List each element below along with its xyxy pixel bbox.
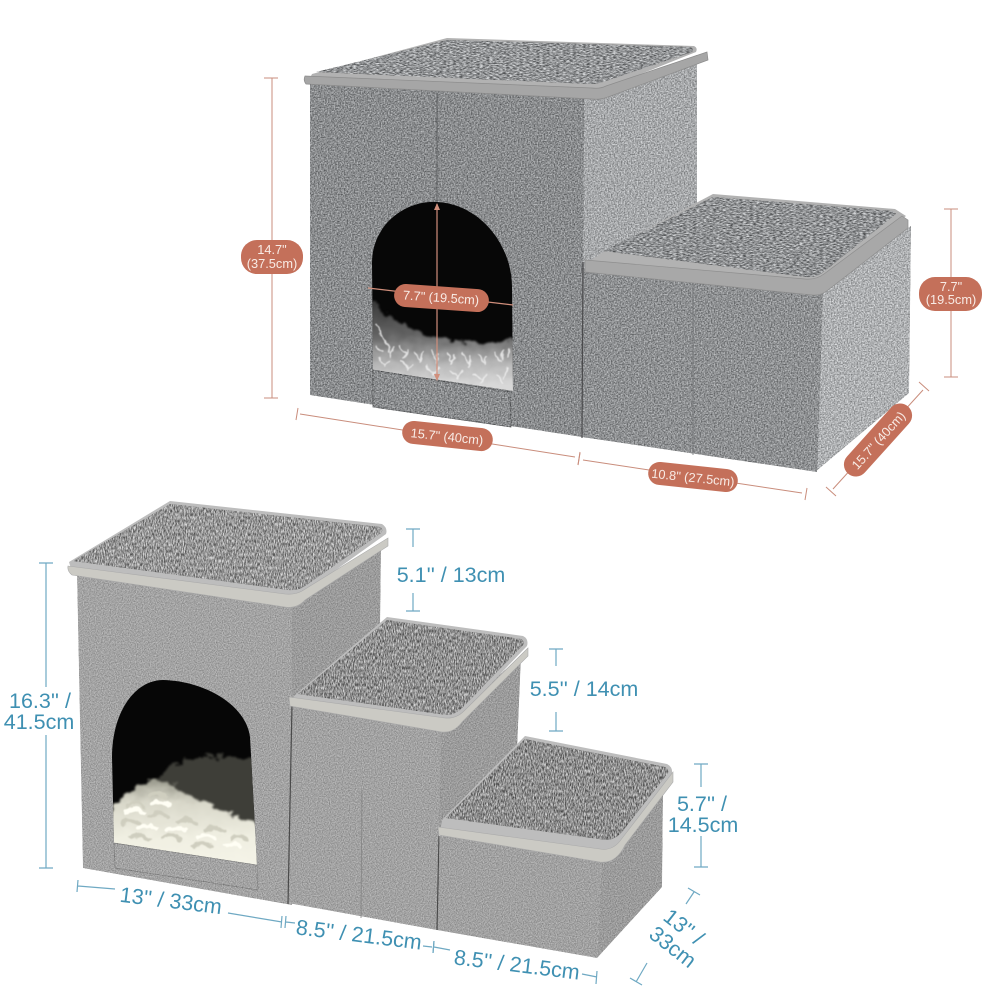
low step lid rim	[585, 216, 908, 295]
flap below door	[114, 843, 258, 890]
annotation: upper step height 7.7 in: 7.7"	[940, 279, 962, 294]
annotation: upper height 14.7 in: (37.5cm)	[247, 256, 297, 271]
fur strands	[376, 325, 509, 383]
front flap below door	[373, 370, 511, 427]
tall box right side	[582, 55, 697, 272]
annotation: upper width 15.7 in: 15.7" (40cm)	[410, 425, 484, 448]
annotation: lower depth 13 in: 33cm	[645, 922, 701, 973]
fur tufts	[122, 793, 247, 847]
tall box front face	[310, 80, 584, 437]
seam on low step front	[692, 287, 694, 455]
tall lid surface	[69, 501, 386, 600]
middle lid surface	[291, 617, 528, 724]
annotation: upper step width 10.8 in: 10.8" (27.5cm)	[651, 466, 735, 489]
middle step side	[437, 656, 521, 833]
low step right side	[815, 226, 911, 472]
panel: lower product, three-step pet house	[68, 501, 673, 958]
middle step front	[288, 700, 442, 930]
arch doorway	[112, 680, 257, 865]
annotation: upper step height 7.7 in	[919, 209, 982, 377]
low step carpet	[604, 197, 896, 277]
annotation: lower step 5.7 in: 5.7'' /	[677, 792, 727, 816]
annotation: lower step 5.1 in: 5.1'' / 13cm	[397, 563, 505, 587]
annotation: door size 7.7 in: 7.7" (19.5cm)	[402, 287, 480, 308]
annotation: lower step 5.7 in	[668, 764, 738, 867]
seam on tall box front	[436, 93, 438, 202]
tall carpet	[73, 504, 382, 590]
back shaded fur	[150, 756, 258, 830]
tall box front	[77, 572, 293, 905]
lid surface under carpet	[310, 38, 697, 92]
annotation: lower width 13 in	[77, 880, 282, 928]
annotation: middle step width 8.5 in: 8.5'' / 21.5cm	[295, 915, 423, 955]
annotation: upper height 14.7 in	[241, 78, 303, 398]
white fur bedding	[372, 300, 513, 391]
lowest lid surface	[440, 736, 672, 852]
annotation: lower step 5.5 in: 5.5'' / 14cm	[530, 677, 638, 701]
tall box lid rim	[304, 52, 708, 99]
lowest rim	[438, 772, 673, 862]
annotation: lower step 5.5 in	[530, 649, 638, 731]
low step front face	[582, 268, 823, 472]
lowest step front	[437, 830, 602, 958]
lowest step side	[597, 790, 663, 958]
annotation: upper depth 15.7 in: 15.7" (40cm)	[848, 408, 908, 472]
annotation: upper width 15.7 in	[296, 408, 580, 465]
arch doorway	[372, 202, 513, 391]
middle rim	[289, 648, 528, 732]
lowest carpet	[446, 739, 668, 840]
annotation: lowest step width 8.5 in: 8.5'' / 21.5cm	[453, 945, 581, 985]
annotation: lower height 16.3 in: 41.5cm	[4, 710, 74, 734]
low step lid surface	[588, 194, 906, 284]
gap between boxes	[582, 262, 583, 438]
annotation: lower depth 13 in	[630, 888, 708, 985]
panel: upper product, two-step pet house	[304, 38, 911, 472]
annotation: lower depth 13 in: 13'' /	[659, 904, 708, 950]
annotation: lower step 5.7 in: 14.5cm	[668, 813, 738, 837]
annotation: lower height 16.3 in: 16.3'' /	[9, 689, 71, 713]
tall lid rim	[68, 538, 388, 607]
box gap	[288, 705, 292, 904]
front fur	[110, 780, 260, 872]
annotation: lower step 5.1 in	[397, 529, 505, 611]
tall box side	[290, 545, 381, 708]
cream fur bedding	[110, 756, 260, 872]
annotation: upper step height 7.7 in: (19.5cm)	[926, 292, 976, 307]
annotation: upper depth 15.7 in	[826, 382, 929, 496]
top carpet	[316, 40, 693, 84]
annotation: lower width 13 in: 13'' / 33cm	[118, 883, 223, 919]
step gap	[437, 836, 439, 930]
middle seam	[361, 790, 362, 918]
annotation: upper height 14.7 in: 14.7"	[257, 242, 287, 257]
annotation: lower height 16.3 in	[4, 563, 74, 868]
annotation: upper step width 10.8 in	[578, 453, 807, 500]
annotation: door size 7.7 in	[368, 203, 513, 381]
middle carpet	[298, 620, 524, 715]
